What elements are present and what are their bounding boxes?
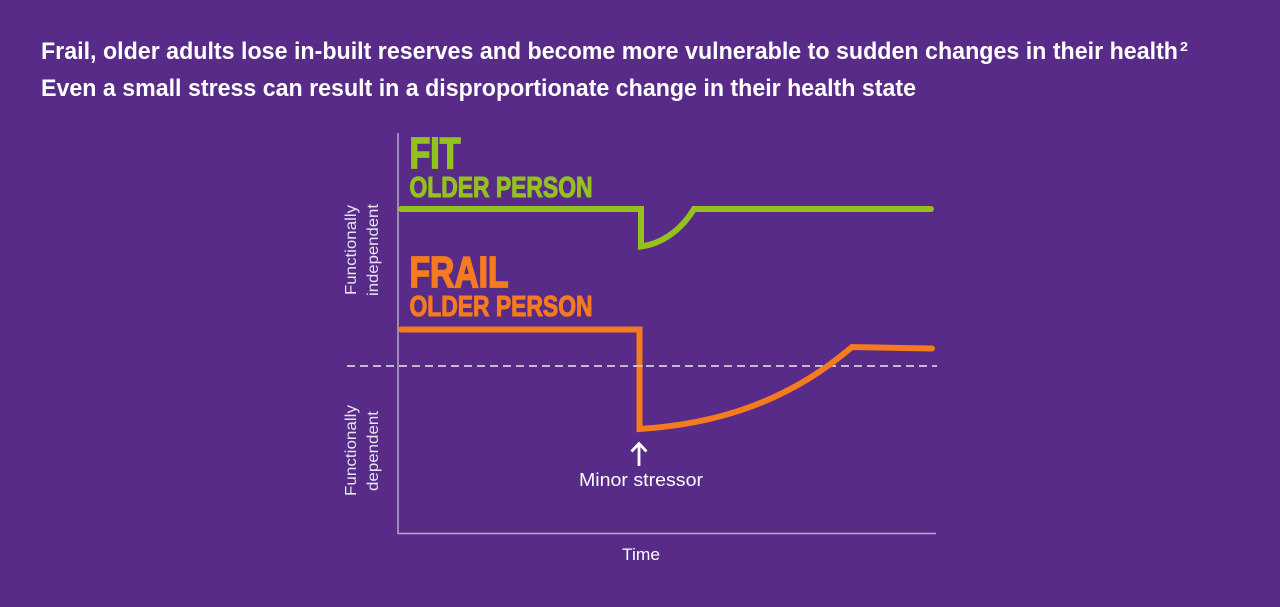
y axis label: functionally dependent: dependent bbox=[365, 410, 382, 491]
y axis label: functionally dependent: Functionally bbox=[343, 405, 360, 496]
y axis label: functionally independent: independent bbox=[365, 203, 382, 296]
title: 2 bbox=[1180, 39, 1188, 54]
title bbox=[41, 38, 1188, 102]
frail older person line bbox=[401, 330, 932, 429]
y axis label: functionally independent: Functionally bbox=[343, 205, 360, 295]
fit older person label: OLDER PERSON bbox=[410, 172, 592, 204]
frail older person label bbox=[410, 248, 592, 323]
minor stressor label: Minor stressor bbox=[579, 469, 703, 490]
y axis label: functionally dependent bbox=[343, 405, 382, 496]
threshold dashed line bbox=[347, 365, 937, 367]
dashed line overlay on frail drop bbox=[636, 365, 643, 367]
y axis label: functionally independent bbox=[343, 203, 382, 296]
frail older person label: OLDER PERSON bbox=[410, 291, 592, 323]
fit older person line bbox=[401, 209, 931, 246]
title: Even a small stress can result in a disproportionate change in their health state bbox=[41, 75, 916, 102]
title: Frail, older adults lose in-built reserves and become more vulnerable to sudden changes in their health bbox=[41, 38, 1178, 65]
fit older person label: FIT bbox=[410, 129, 461, 178]
chart axes bbox=[398, 133, 936, 534]
fit older person label bbox=[410, 129, 592, 204]
x axis label: time: Time bbox=[622, 545, 660, 564]
frail older person label: FRAIL bbox=[410, 248, 508, 297]
icon: stressor arrow bbox=[632, 444, 646, 466]
